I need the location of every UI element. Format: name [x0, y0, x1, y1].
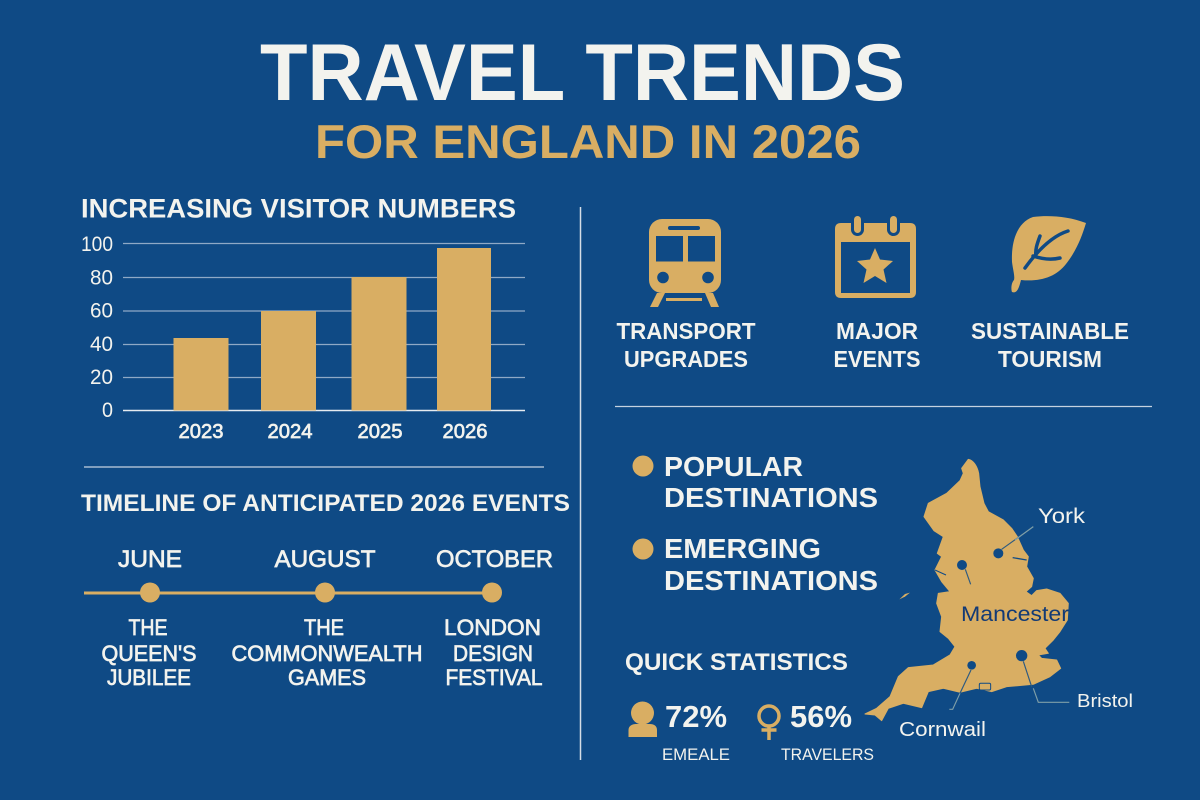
- legend: popular destinations: DESTINATIONS: [664, 482, 878, 513]
- bar chart: 20: [90, 366, 113, 389]
- map of England: Cornwail: [899, 719, 986, 741]
- label: sustainable tourism: [971, 318, 1129, 372]
- timeline: GAMES: [288, 665, 366, 690]
- bar chart: 40: [90, 333, 113, 356]
- map of England: Mancester: [961, 603, 1069, 626]
- timeline: FESTIVAL: [446, 665, 542, 690]
- timeline: THE: [128, 615, 168, 640]
- bar chart: 100: [81, 233, 113, 256]
- heading: quick statistics: QUICK STATISTICS: [625, 649, 848, 676]
- bar chart: 2023: [178, 420, 224, 443]
- label: major events: MAJOR: [836, 318, 918, 344]
- label: major events: EVENTS: [834, 346, 920, 372]
- bar chart: 80: [90, 266, 113, 289]
- legend: popular destinations: [632, 451, 878, 513]
- stat: 72% female: EMEALE: [662, 745, 730, 764]
- label: transport upgrades: [616, 318, 756, 372]
- bar chart: 2026: [442, 420, 488, 443]
- timeline: DESIGN: [453, 641, 533, 666]
- title: FOR ENGLAND IN 2026: [315, 115, 861, 168]
- timeline: QUEEN'S: [102, 641, 196, 666]
- timeline: OCTOBER: [436, 546, 553, 573]
- stat: 56% travelers: TRAVELERS: [781, 745, 874, 764]
- title: [260, 28, 905, 168]
- stat: 56% travelers: [759, 699, 874, 764]
- icon: train: [649, 219, 721, 307]
- bar chart: [81, 233, 525, 443]
- label: transport upgrades: TRANSPORT: [616, 318, 756, 344]
- timeline: JUNE: [118, 546, 182, 573]
- timeline: AUGUST: [274, 546, 376, 573]
- timeline: LONDON: [444, 615, 541, 640]
- timeline: [84, 546, 553, 690]
- timeline: COMMONWEALTH: [232, 641, 422, 666]
- label: major events: [834, 318, 920, 372]
- bar chart: 60: [90, 300, 113, 323]
- stat: 72% female: 72%: [665, 699, 727, 734]
- map of England: [865, 459, 1133, 741]
- heading: increasing visitor numbers: INCREASING VISITOR NUMBERS: [81, 194, 516, 224]
- map of England: Bristol: [1077, 691, 1133, 711]
- timeline: JUBILEE: [107, 665, 191, 690]
- legend: emerging destinations: [632, 533, 878, 596]
- legend: popular destinations: POPULAR: [664, 451, 803, 482]
- icon: calendar with star: [835, 213, 916, 298]
- legend: emerging destinations: DESTINATIONS: [664, 565, 878, 596]
- label: sustainable tourism: SUSTAINABLE: [971, 318, 1129, 344]
- map of England: York: [1038, 505, 1086, 528]
- legend: emerging destinations: EMERGING: [664, 533, 821, 564]
- bar chart: 2024: [268, 420, 312, 443]
- icon: leaf: [1011, 216, 1086, 292]
- heading: timeline: TIMELINE OF ANTICIPATED 2026 EVENTS: [81, 490, 570, 517]
- stat: 56% travelers: 56%: [790, 699, 852, 734]
- bar chart: 2025: [358, 420, 402, 443]
- stat: 72% female: [628, 699, 730, 764]
- timeline: THE: [304, 615, 344, 640]
- bar chart: 0: [102, 399, 113, 422]
- label: sustainable tourism: TOURISM: [998, 346, 1102, 372]
- label: transport upgrades: UPGRADES: [624, 346, 748, 372]
- title: TRAVEL TRENDS: [260, 28, 905, 118]
